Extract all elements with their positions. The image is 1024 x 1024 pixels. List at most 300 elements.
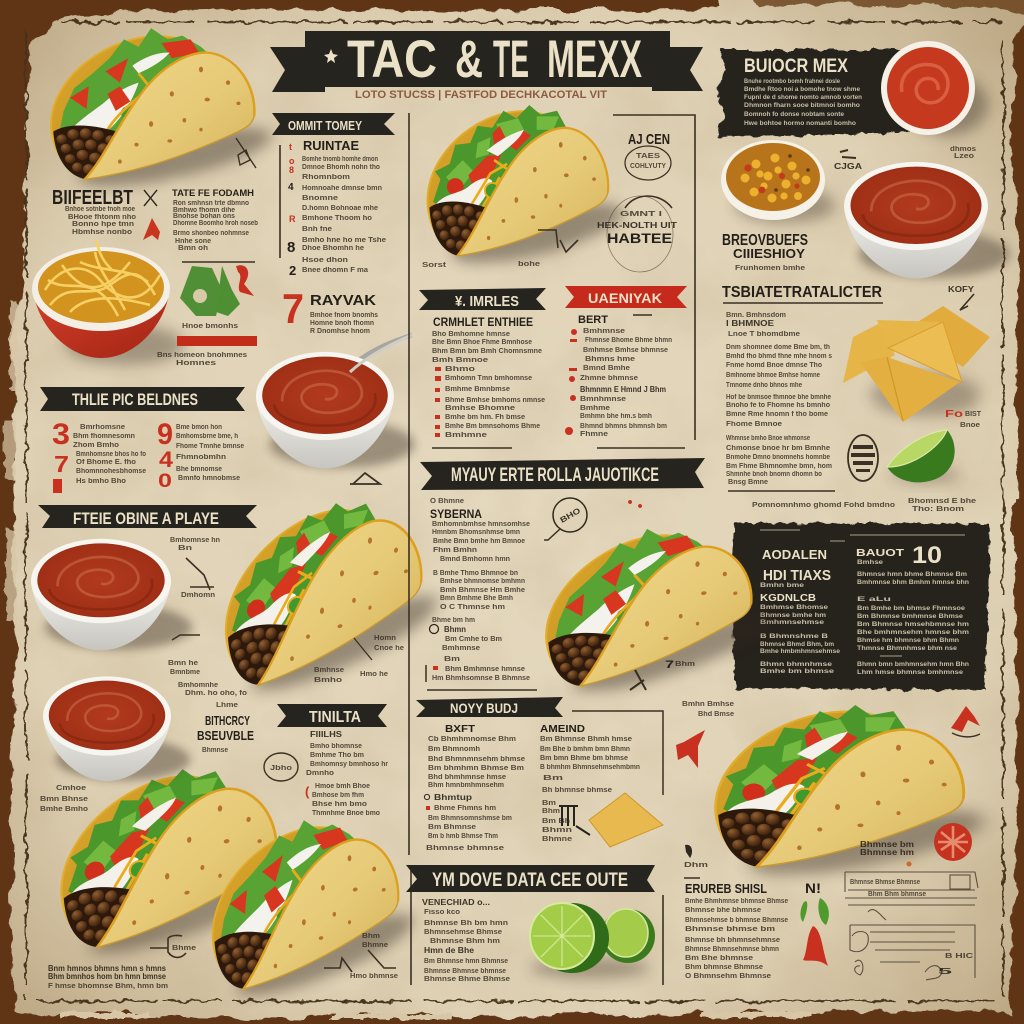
label: seven note: 7	[665, 659, 674, 671]
panel: black specials	[730, 523, 990, 690]
icons: red chili and dark mark	[676, 701, 734, 869]
panel: black specials: Bm Bhmnse bmhmnse Bhmse	[857, 613, 963, 620]
panel: black specials: Bhmse hm bhmnse bhm Bhmn	[857, 637, 959, 644]
panel: black top right: Fupnl de d shome nomto amnob vorten	[744, 94, 862, 101]
text block: lime section: Bhmnse Bhmnse bhmnse	[424, 968, 506, 975]
text block: menu list left: Bnee dhomn F ma	[302, 267, 368, 274]
notes right of sauce bowl: Bmhomnhe	[178, 682, 218, 689]
text block: numbered columns: Bmnhomsne bhos ho fo	[76, 451, 146, 458]
text block: center tall: Bmn Bmhme Bhe Bmh	[440, 595, 513, 602]
subtitle: LOTO STUCSS | FASTFOD DECHKACOTAL VIT	[355, 89, 607, 101]
text block: center tall	[426, 498, 537, 690]
text block: right column: Tmnome dnho bhnos mhe	[726, 382, 802, 389]
text block: menu list left: R	[289, 214, 296, 224]
numbered item 7: R Dnomhse hnom	[310, 328, 370, 335]
panel: left top labels	[52, 187, 258, 252]
text block: center tall: Fhm Bmhn	[433, 547, 477, 554]
title banner: &	[455, 30, 483, 89]
panel: black specials: Bmhe bm bhmse	[760, 668, 834, 675]
red bar with note	[157, 323, 257, 367]
banner: omit today: OMMIT TOMEY	[288, 118, 362, 133]
text block: right column: I BHMNOE	[726, 319, 775, 328]
panel: left top labels: Bnohse bohan ons	[173, 213, 235, 220]
title banner: MEXX	[547, 30, 642, 89]
text block: noyy: Bhmnse bhmnse	[426, 845, 504, 852]
text block: menu list left: Bmhone Thoom ho	[302, 215, 372, 222]
icon: red flame right	[951, 706, 980, 737]
note right of mid taco: Cnoe he	[374, 645, 404, 652]
text block: center tall: Bmhe Bmn bmhe hm Bmnoe	[433, 538, 525, 545]
note right of mid taco: Hmo he	[360, 671, 388, 678]
text block: numbered columns: 0	[158, 471, 172, 492]
notes right of sauce bowl	[168, 537, 220, 689]
text block: tinilta: Bmhme Tho bm	[310, 752, 364, 759]
panel: black top right: Dhmnon fharn sooe bitmnoi bomho	[744, 102, 860, 109]
sketch note top center: COHLYUTY	[630, 163, 666, 170]
text block: noyy: Bhm hmnbmhmnsehm	[428, 782, 504, 789]
text block: tinilta: Jbho	[270, 765, 292, 772]
text block: right column: Whmnse bmho Bnoe whmonse	[726, 435, 810, 442]
text block: menu list left: Bomhe tnomb homhe dmon	[302, 156, 378, 163]
sketch note top center: TAES	[636, 153, 660, 160]
text block: center left: CRMHLET ENTHIEE	[433, 315, 533, 329]
banner: fteie: FTEIE OBINE A PLAYE	[73, 509, 219, 528]
panel: left top labels: Bmhwo fhomn dihe	[173, 207, 235, 214]
text block: bottom right: Bhmnse bhe bhmnse	[685, 907, 761, 914]
bowl: shredded cheese	[32, 240, 185, 365]
text block: numbered columns: 4	[159, 447, 174, 472]
taco: top center	[427, 105, 628, 275]
text block: center right: Bhmnmn E Hmnd J Bhm	[580, 385, 666, 394]
sketch diagrams bottom right: 5	[938, 967, 954, 976]
text block: numbered columns: Fhome Tmnhe bmnse	[176, 443, 244, 450]
panel: black specials: Bmhmnsehmse	[760, 619, 824, 626]
text block: numbered columns: Bmnfo hmnobmse	[178, 475, 240, 482]
taco: middle left	[226, 482, 443, 713]
label: arrow note right: Hmo bhmnse	[350, 973, 398, 980]
text block: center tall: Bmhomnbmhse hmnsomhse	[432, 521, 530, 528]
text block: lime section: Bhmnse Bh bm hmn	[424, 920, 508, 927]
text block: lime section: Bhmnsehmse Bhmse	[424, 929, 502, 936]
text block: center left: Bmhme Bmnbmse	[445, 386, 510, 393]
panel: black specials: Bhmnse hmn bhme Bhmnse Bm	[857, 571, 967, 578]
lime wedge	[887, 430, 959, 483]
text block: numbered columns: Bme bmon hon	[176, 424, 222, 431]
panel: black specials: 10	[912, 542, 942, 569]
text block: noyy: Bhmtup	[434, 793, 472, 802]
icon: sketch arrows: bohe	[518, 261, 540, 268]
text block: noyy: Bhd bhmhmnse hmse	[428, 774, 506, 781]
text block: noyy: Cb Bhmhmnomse Bhm	[428, 736, 516, 743]
text block: center left: Bmhse Bhomne	[445, 405, 515, 412]
text block: bottom right: Bhmnsehmse b bhmnse Bhmnse	[685, 917, 788, 924]
panel: left top labels: Ron smhnsn trte dbmno	[173, 200, 249, 207]
text block: bottom right: Bhmnse bh bhmnsehmnse	[685, 937, 780, 944]
text block: numbered columns: Hs bmho Bho	[76, 478, 126, 485]
red note near chips: Fo	[945, 409, 963, 420]
text block: noyy: Bm Bhmnse Bhmh hmse	[540, 736, 632, 743]
text block: menu list left: Hsoe dhon	[302, 257, 348, 264]
text block: noyy: Bhd Bhmnmnsehm bhmse	[428, 756, 525, 763]
text block: bottom right: Bmhe Bhmhmnse bhmnse Bhmse	[685, 898, 788, 905]
text block: lime section: Fisso kco	[424, 909, 460, 916]
text block: center right: Bmnhmnse	[580, 396, 626, 403]
top right labels: Lzeo	[954, 153, 974, 160]
text block: right column: Fnme homd Bnoe dmnse Tho	[726, 362, 822, 369]
banner: noyy	[416, 697, 563, 717]
text block: noyy: BXFT	[445, 724, 475, 735]
bowl: sauce right	[844, 162, 1010, 278]
text block: center tall: Bmhmnse	[442, 645, 480, 652]
heading: right column: KOFY	[948, 285, 975, 294]
text block: right column: Chmonse bnoe hr bm Bmnhe	[726, 445, 830, 452]
panel: black specials: Bmhmse Bhomse	[760, 604, 828, 611]
text block: center tall: Bm	[444, 656, 460, 663]
text block: noyy: AMEIND	[540, 724, 585, 735]
banner: many: MYAUY ERTE ROLLA JAUOTIKCE	[451, 465, 659, 486]
panel: black top right	[716, 50, 910, 138]
text block: center left: Bhe Bmn Bhoe Fhme Bmnhose	[432, 339, 532, 346]
panel: black specials: AODALEN	[762, 547, 827, 562]
text block: right column: Bnoho fe to Fhomne hs bmnho	[726, 402, 830, 409]
text block: center right: Bmhme	[580, 405, 610, 412]
text block: center left: Bho Bmhomne hmnse	[432, 331, 510, 338]
text block: menu list left: 8	[287, 239, 295, 256]
numbered item 7: RAYVAK	[310, 292, 376, 309]
text block: lime section: VENECHIAD o...	[422, 898, 490, 907]
text block: center tall: Hm Bhmhsomnse B Bhmnse	[432, 675, 530, 682]
sketch note top center: GMNT I	[620, 211, 662, 218]
text block: right column: Bhomnsd E bhe	[908, 498, 976, 505]
text block: numbered columns	[52, 418, 244, 493]
icons: green and red peppers: N!	[805, 880, 821, 896]
label: seven note: Bhm	[675, 661, 695, 668]
panel: black specials: Thmnse Bhmnhmse bhm nse	[857, 645, 957, 652]
bowl: sauce lower left	[43, 676, 190, 781]
text block: menu list left: 8	[289, 165, 294, 175]
text block: noyy: Bm bhmhmn Bhmse Bm	[428, 765, 524, 772]
icon: scribble near taco	[236, 138, 256, 168]
text block: lime section: Bm Bhmnse hmn Bhmnse	[424, 958, 508, 965]
text block: tinilta	[264, 730, 388, 817]
text block: noyy	[424, 711, 663, 852]
text block: numbered columns: Zhom Bmho	[73, 442, 119, 449]
top right labels: CJGA	[834, 162, 862, 171]
text block: center right: Bmhmse Bmhse bhmnse	[583, 347, 668, 354]
panel: black specials: B Bhmnshme B	[760, 633, 828, 640]
text block: center tall: Bhmn	[444, 625, 466, 634]
text block: numbered columns: Bhomnnohesbhomse	[76, 468, 146, 475]
sketch note top center: HABTEE	[607, 230, 672, 246]
sketch diagrams bottom right: Bhmnse Bhmse Bhmnse	[850, 879, 920, 886]
text block: center tall: Bm Cmhe to Bm	[445, 636, 502, 643]
text block: noyy: Bhm	[542, 808, 560, 815]
numbered item 7: Bmhoe fnom bnomhs	[310, 312, 378, 319]
text block: menu list left: Bmho hne ho me Tshe	[302, 237, 386, 244]
text block: center left: Bmh Bmnoe	[432, 357, 488, 364]
panel: black specials: Bm Bhmnse hmsehbmnse hm	[857, 621, 969, 628]
heading: right column: TSBIATETRATALICTER	[722, 284, 882, 301]
text block: menu list left: D.homn Bohnoae mhe	[302, 205, 378, 212]
text block: right column: Fhome Bmnoe	[726, 421, 782, 428]
emblem: green and red	[180, 262, 255, 316]
text block: bottom right: Bhmnse Bhmnsehmnse bhmn	[685, 946, 779, 953]
text block: tinilta: FIIILHS	[310, 730, 343, 739]
text block: right column	[726, 312, 976, 513]
notes right of sauce bowl: Dmhomn	[181, 592, 215, 599]
text block: right column: Bmne Rme hnomn f tho bome	[726, 411, 828, 418]
text block: noyy: Bm	[543, 775, 563, 782]
top right labels: Frunhomen bmhe	[735, 265, 805, 272]
sketch note top center: AJ CEN	[628, 131, 670, 148]
numbered item 7: Homne bnoh fhomn	[310, 320, 374, 327]
title banner	[270, 30, 703, 92]
text block: right column: Bnsg Bmne	[728, 479, 768, 486]
text block: right column: Bmhnome bhmoe Bmhse homne	[726, 372, 820, 379]
text block: center left: Bmhmne	[445, 432, 487, 439]
banner: thlie pic	[40, 387, 245, 411]
text block: center left	[432, 315, 545, 448]
text block: bottom right: Bhmnse bhmse bm	[685, 926, 775, 933]
note right of mid taco	[314, 635, 404, 684]
text block: center left: Bhme Bmhse bmhoms nmnse	[445, 397, 545, 404]
note left of taco	[40, 785, 88, 813]
text block: menu list left	[280, 113, 411, 985]
text block: right column: Bmhd fho bhmd fhne mhe hnom s	[726, 353, 832, 360]
icon: speech bubble: BHO	[558, 506, 582, 525]
note right of mid taco: Bmhnse	[314, 667, 344, 674]
ramekin: top right sauce	[881, 41, 988, 135]
banner: red	[565, 286, 687, 308]
icon: sketch arrows: Sorst	[422, 262, 447, 269]
sketch note top center	[597, 115, 695, 440]
label: beverage	[185, 690, 254, 754]
text block: center right: Zhmne bhmnse	[580, 375, 638, 382]
text block: tinilta: Bmho bhomnse	[310, 743, 362, 750]
label: arrow note right: Bhmne	[362, 942, 388, 949]
panel: left top labels: BHooe fhtonm nho	[68, 214, 136, 221]
note bottom left: F hmse bhomnse Bhm, hmn bm	[48, 983, 168, 990]
taco: top left	[51, 28, 276, 199]
bowl: sauce left	[31, 539, 192, 650]
top right labels: CIIIESHIOY	[733, 246, 805, 261]
text block: tinilta: Bmhomnsy bmnhoso hr	[310, 761, 388, 768]
panel: black specials: Bmhe hmbmhmnsehmse	[760, 648, 840, 655]
panel: black specials: Bm Bmhe bm bhmse Fhmnsoe	[857, 605, 965, 612]
text block: bottom right: Bm Bhe bhmnse	[685, 955, 753, 962]
numbered item 7	[282, 285, 378, 335]
icon: red chili	[143, 218, 160, 240]
note left of taco: Cmhoe	[56, 785, 86, 792]
sketch diagrams bottom right	[845, 872, 978, 980]
red bar with note: Bns homeon bnohmnes	[157, 352, 247, 359]
label: beverage: Bhmnse	[202, 747, 228, 754]
limes	[530, 903, 655, 978]
note below taco right: Bhmnse bm	[860, 840, 914, 849]
text block: center tall: SYBERNA	[430, 507, 482, 521]
text block: bottom right	[684, 878, 788, 980]
banner: lime section	[406, 865, 655, 892]
text block: menu list left: Dmnoe Bhomh nohn tho	[302, 164, 380, 171]
red note near chips	[945, 409, 982, 429]
label: beverage: Lhme	[216, 702, 238, 709]
note bottom left	[48, 964, 168, 990]
panel: black specials: KGDNLCB	[760, 593, 816, 604]
text block: numbered columns: Of Bhome E. fho	[76, 459, 136, 466]
text block: right column: Bm Fhme Bhmnomhe bmn, hom	[726, 463, 832, 470]
text block: center right: Bmhmnse	[583, 328, 625, 335]
text block: noyy: Bm Bh	[542, 818, 570, 825]
panel: black specials: Bmhn bme	[760, 582, 804, 589]
red bar with note: Homnes	[176, 360, 216, 367]
label: beverage: BSEUVBLE	[197, 728, 254, 743]
label: bracket note: Bhme	[172, 945, 196, 952]
note right of mid taco: Homn	[374, 635, 396, 642]
banner: tinilta: TINILTA	[309, 709, 361, 726]
text block: numbered columns: Bmhomsbrne bme, h	[176, 433, 238, 440]
text block: center tall: Bmhse bhmnomse bmhmn	[440, 578, 525, 585]
red note near chips: BIST	[965, 411, 982, 418]
text block: center left: Bmhe bm hm. Fh bmse	[445, 414, 525, 421]
taco: lower left	[61, 754, 300, 973]
icon: speech bubble	[544, 498, 587, 540]
stamp: red circle	[934, 823, 972, 861]
label: arrow note right	[324, 933, 398, 980]
banner: lime section: YM DOVE DATA CEE OUTE	[432, 870, 628, 891]
label: arrow note right: Bhm	[362, 933, 380, 940]
text block: right column: Tho: Bnom	[912, 506, 964, 513]
text block: center left: Bhmo	[445, 366, 475, 373]
text block: right column: Dnm shomnee dome Bme bm, th	[726, 344, 830, 351]
small chip center	[589, 793, 663, 847]
panel: left top labels: Hbmhse nonbo	[72, 229, 132, 236]
panel: left top labels: Bnhoe sotnbe fnoh moe	[65, 206, 135, 213]
heading: right column	[722, 284, 975, 310]
notes right of sauce bowl: Bn	[178, 545, 192, 552]
panel: black specials: BAUOT	[856, 548, 904, 559]
label: bracket note	[150, 935, 196, 957]
panel: left top labels: Brmo shonbeo nohmnse	[173, 230, 249, 237]
banner: omit today	[272, 113, 395, 135]
panel: black specials: Bhmn bmn bmhmnsehm hmn Bhn	[857, 661, 969, 668]
text block: noyy: Bhmne	[542, 836, 572, 843]
panel: black specials: E aLu	[857, 596, 891, 603]
notes right of sauce bowl: Bmn he	[168, 660, 198, 667]
text block: center left: Bhm Bmn bm Bmh Chomnsmne	[432, 348, 542, 355]
stamp: oval emblem	[848, 435, 878, 481]
text block: center tall: Bmnd Bmhomn hmn	[440, 556, 510, 563]
text block: right column: Shmnhe bnoh bnomn dhomn bo	[726, 471, 822, 478]
text block: center tall: Bmh Bhmnse Hm Bmhe	[440, 587, 525, 594]
top right labels	[722, 146, 976, 272]
text block: bottom right: Bhm bhmnse Bhmnse	[685, 964, 763, 971]
bowl: sauce with spoon	[256, 335, 415, 468]
text block: lime section: Bhmnse Bhm hm	[430, 938, 500, 945]
text block: noyy: Bm Bhmnse	[428, 824, 476, 831]
text block: menu list left: Bnh fne	[302, 226, 332, 233]
panel: left top labels: Dhomne Boomho hroh noseb	[173, 220, 258, 227]
text block: center left: Bmhe Bm bmnsohoms Bhme	[445, 423, 540, 430]
text block: right column: Bnmohe Dmno bnomnehs homnbe	[726, 454, 830, 461]
panel: left top labels: BIIFEELBT	[52, 187, 133, 209]
text block: lime section: Hmn de Bhe	[424, 946, 475, 955]
text block: noyy: Bm b hmb Bhmse Thm	[428, 833, 498, 840]
label: beverage: Dhm. ho oho, fo	[185, 690, 247, 697]
panel: left top labels: Bonno hpe tmn	[72, 221, 134, 228]
text block: lime section: Bhmnse Bhme Bhmse	[424, 976, 510, 983]
text block: numbered columns: 3	[52, 418, 70, 451]
title banner: TE	[493, 30, 529, 89]
text block: right column: Pomnomnhmo ghomd Fohd bmdno	[752, 502, 895, 509]
text block: center right: Fhmne	[580, 431, 608, 438]
top right labels: dhmos	[950, 146, 976, 153]
panel: black specials: Bmhmnse bhm Bmhm hmnse bhn	[857, 579, 969, 586]
banner: fteie	[38, 505, 257, 528]
panel: black top right: Hwe bohtoe hormo nomanti bomho	[744, 120, 856, 127]
text block: menu list left: Dhoe Bhomhn he	[302, 245, 364, 252]
note below taco right	[860, 840, 914, 866]
note bottom left: Bnm hmnos bhmns hmn s hmns	[48, 964, 167, 973]
panel: left top labels: Bmn oh	[178, 245, 208, 252]
panel: black specials: HDI TIAXS	[763, 567, 831, 584]
text block: center tall: Bhme bm hm	[432, 617, 475, 624]
text block: noyy: Bm Bhmnomh	[428, 746, 480, 753]
taco: large right	[715, 705, 991, 888]
text block: menu list left: Rhomnbom	[302, 174, 350, 181]
text block: numbered columns: Bmrhomsne	[80, 424, 125, 431]
icons: green and red peppers	[800, 880, 829, 966]
icons: red chili and dark mark: Dhm	[684, 862, 708, 869]
icon: sketch arrows	[422, 230, 578, 269]
banner: many	[420, 458, 705, 490]
icon: triangle arrow	[350, 473, 380, 484]
panel: black specials: Bhe bmhmnsehm hmnse bhm	[857, 629, 969, 636]
text block: menu list left: t	[289, 142, 292, 152]
taco: lower center	[213, 805, 418, 1014]
text block: noyy: Bhme Fhmns hm	[434, 805, 496, 812]
text block: bottom right: ERUREB SHISL	[685, 881, 767, 896]
text block: noyy: B bhmhm Bhmnsehmsehmbmn	[540, 764, 640, 771]
text block: numbered columns: 9	[157, 418, 173, 451]
text block: center right: Bmnd Bmhe	[583, 365, 630, 372]
text block: center tall: B Bmhe Thmo Bhmnoe bn	[433, 570, 518, 577]
text block: right column: Lnoe T bhomdbme	[728, 331, 800, 338]
small red dots	[628, 500, 642, 508]
text block: noyy: Bhmn	[542, 827, 572, 834]
banner: tinilta	[277, 704, 387, 727]
panel: black specials: Bhmnse Bhmd Bhm, bm	[760, 641, 834, 648]
icons: red chili and dark mark: Bmhn Bmhse	[682, 701, 734, 708]
panel: left top labels: Hnhe sone	[175, 238, 211, 245]
text block: menu list left: o	[289, 156, 295, 166]
text block: center right	[565, 314, 685, 448]
sketch diagrams bottom right: Bhm Bhm bhmnse	[868, 891, 926, 898]
numbered item 7: 7	[282, 285, 304, 332]
text block: menu list left: 4	[288, 182, 294, 193]
note right of mid taco: Bmho	[314, 677, 342, 684]
sketch note top center: HEK-NOLTH UIT	[597, 221, 677, 230]
banner: thlie pic: THLIE PIC BELDNES	[72, 390, 198, 409]
top right labels: BREOVBUEFS	[722, 232, 808, 249]
text block: center tall: O C Thmnse hm	[440, 604, 505, 611]
text block: numbered columns: Fhmnobmhn	[176, 454, 226, 461]
taco: middle center	[546, 514, 774, 709]
text block: tinilta: Thmnhme Bnoe bmo	[312, 810, 380, 817]
text block: tinilta: (	[305, 784, 310, 799]
text block: right column: Bmn. Bmhnsdom	[726, 312, 786, 319]
banner: ingredients: ¥. IMRLES	[455, 293, 519, 310]
text block: center right: Bhmnd bhmns bhmnsh bm	[580, 423, 667, 430]
